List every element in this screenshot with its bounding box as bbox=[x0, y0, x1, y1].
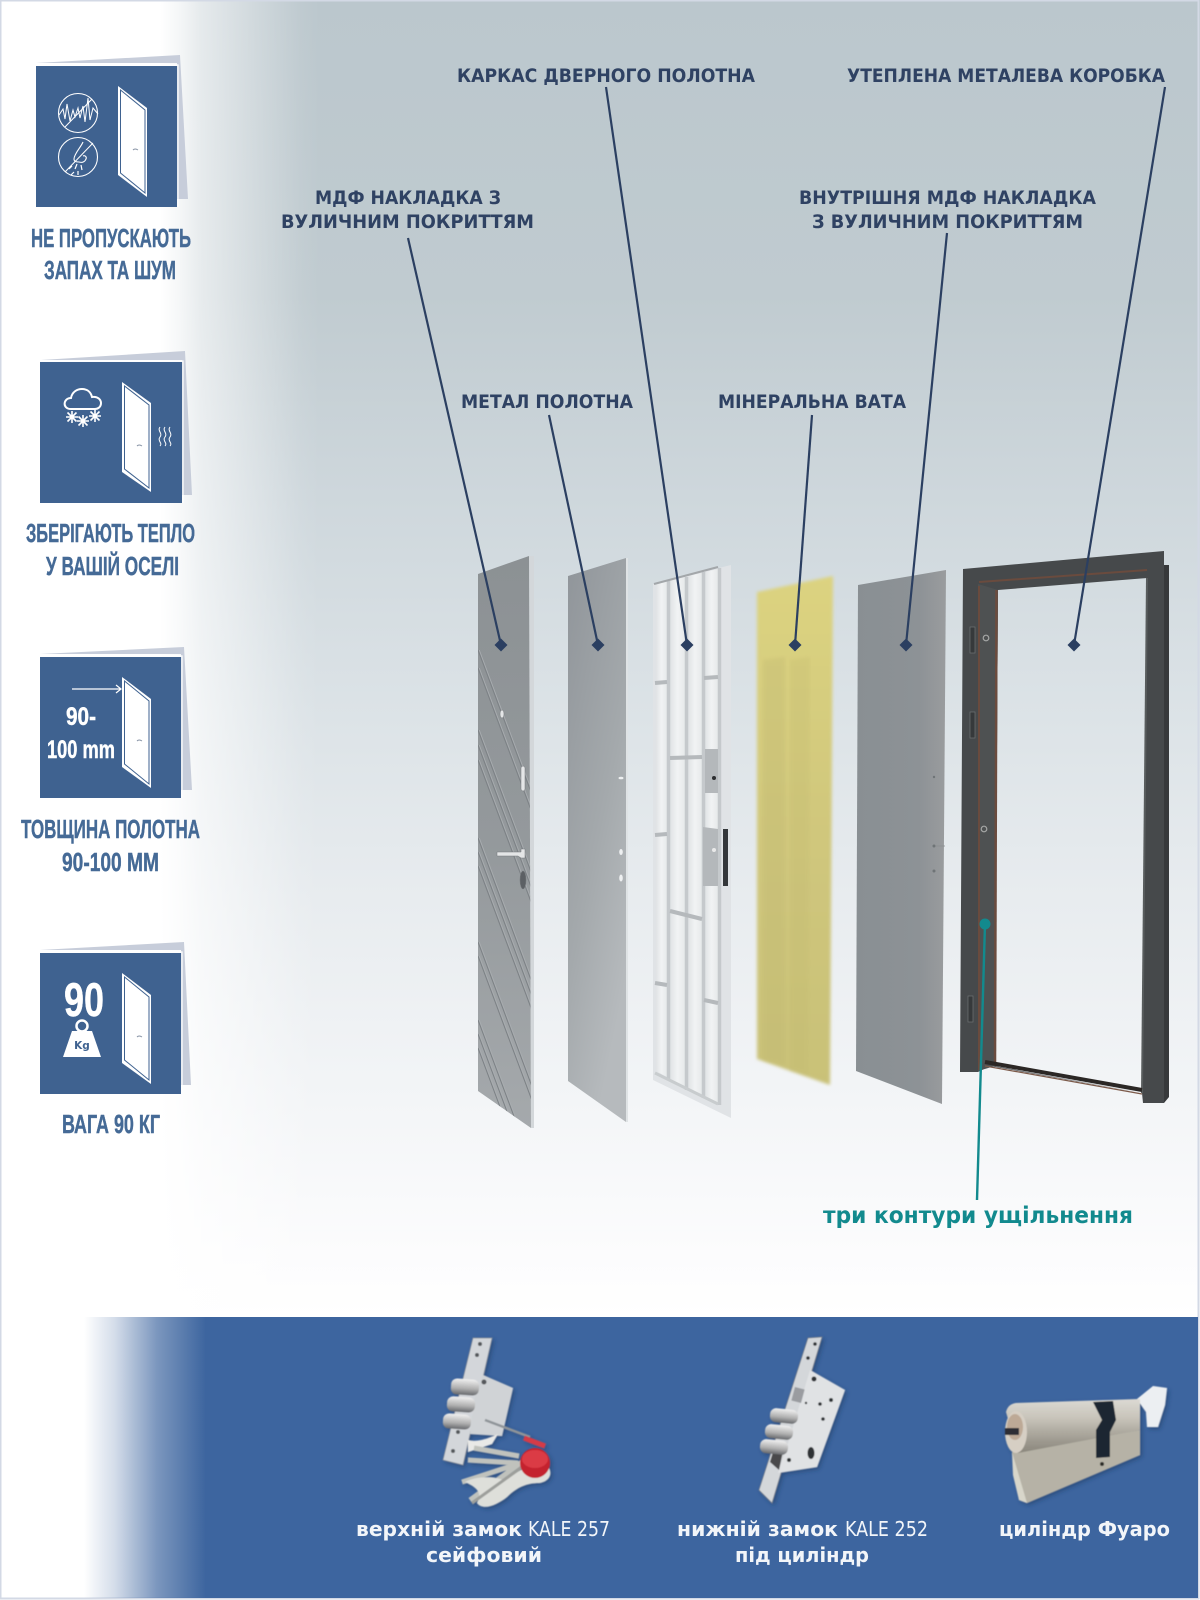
icon: door with thickness arrow: 90- bbox=[66, 703, 96, 731]
panel: mineral wool bbox=[757, 576, 833, 1085]
label: leaf thickness bbox=[21, 814, 200, 877]
label: upper lock: верхній замок bbox=[356, 1517, 522, 1541]
heading: door leaf frame: КАРКАС ДВЕРНОГО ПОЛОТНА bbox=[457, 65, 755, 87]
icon: door with weight: 90 bbox=[64, 973, 104, 1026]
panel: hardware bar bbox=[84, 1317, 1198, 1598]
panel: insulated metal frame bbox=[960, 551, 1169, 1103]
icon: door with thickness arrow: 100 mm bbox=[47, 736, 115, 764]
icon: upper lock KALE 257 bbox=[442, 1338, 550, 1507]
icon: lower lock KALE 252 bbox=[759, 1337, 845, 1503]
heading: inner MDF overlay bbox=[799, 187, 1096, 233]
label: no smell and noise bbox=[31, 223, 191, 285]
heading: outer MDF overlay bbox=[281, 187, 534, 233]
icon: door with weight: Kg bbox=[74, 1040, 90, 1052]
heading: outer MDF overlay: МДФ НАКЛАДКА З bbox=[315, 187, 501, 209]
heading: leaf metal: МЕТАЛ ПОЛОТНА bbox=[461, 391, 633, 413]
heading: inner MDF overlay: З ВУЛИЧНИМ ПОКРИТТЯМ bbox=[812, 211, 1083, 233]
heading: insulated metal frame: УТЕПЛЕНА МЕТАЛЕВА КОРОБКА bbox=[847, 65, 1165, 87]
label: keeps heat: ЗБЕРІГАЮТЬ ТЕПЛО bbox=[26, 518, 195, 548]
feature: leaf thickness bbox=[21, 647, 200, 877]
icon: door with thickness arrow bbox=[40, 647, 192, 798]
panel: leaf metal bbox=[568, 558, 628, 1122]
callout: three sealing contours bbox=[823, 918, 1133, 1229]
label: upper lock: KALE 257 bbox=[528, 1517, 610, 1541]
label: upper lock bbox=[356, 1517, 610, 1567]
label: lower lock: KALE 252 bbox=[845, 1517, 928, 1541]
icon: cylinder bbox=[1005, 1386, 1167, 1503]
icon: door with weight bbox=[40, 942, 191, 1094]
icon: door with cloud and heat bbox=[40, 351, 192, 503]
panel: inner MDF overlay bbox=[856, 570, 946, 1104]
label: lower lock: нижній замок bbox=[677, 1517, 838, 1541]
feature: weight bbox=[40, 942, 191, 1139]
feature: no smell and noise bbox=[31, 55, 191, 285]
icon: door with sound and smell bbox=[36, 55, 188, 207]
label: lower lock bbox=[677, 1517, 928, 1567]
label: cylinder: циліндр Фуаро bbox=[999, 1517, 1170, 1541]
label: no smell and noise: НЕ ПРОПУСКАЮТЬ bbox=[31, 223, 191, 253]
label: leaf thickness: ТОВЩИНА ПОЛОТНА bbox=[21, 814, 200, 844]
label: upper lock: сейфовий bbox=[426, 1543, 542, 1567]
callout: three sealing contours: три контури ущільнення bbox=[823, 1203, 1133, 1229]
label: leaf thickness: 90-100 ММ bbox=[62, 847, 159, 877]
label: keeps heat bbox=[26, 518, 195, 581]
heading: outer MDF overlay: ВУЛИЧНИМ ПОКРИТТЯМ bbox=[281, 211, 534, 233]
heading: mineral wool: МІНЕРАЛЬНА ВАТА bbox=[718, 391, 906, 413]
label: weight: ВАГА 90 КГ bbox=[62, 1109, 160, 1139]
heading: inner MDF overlay: ВНУТРІШНЯ МДФ НАКЛАДКА bbox=[799, 187, 1096, 209]
feature: keeps heat bbox=[26, 351, 195, 581]
panel: door leaf frame bbox=[653, 565, 731, 1118]
label: no smell and noise: ЗАПАХ ТА ШУМ bbox=[44, 255, 176, 285]
label: keeps heat: У ВАШІЙ ОСЕЛІ bbox=[46, 551, 179, 581]
label: lower lock: під циліндр bbox=[735, 1543, 869, 1567]
callout lines bbox=[408, 87, 1165, 652]
panel: outer MDF overlay bbox=[478, 556, 534, 1128]
